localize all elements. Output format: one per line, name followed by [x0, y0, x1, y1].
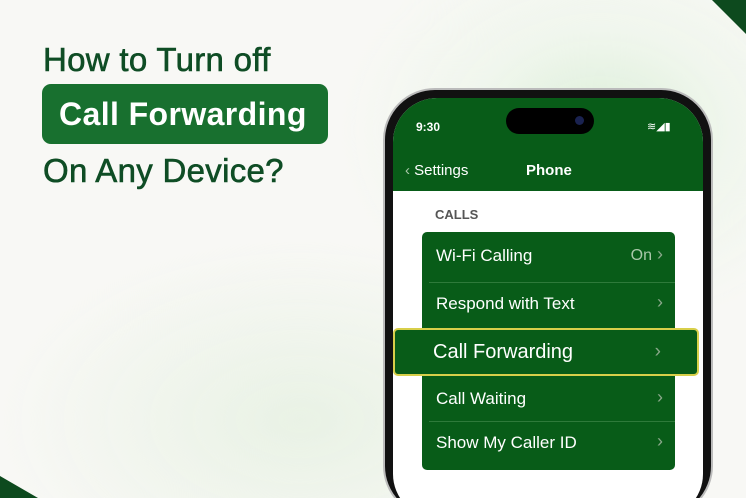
- phone: [383, 88, 713, 498]
- title pill: Call Forwarding: [59, 96, 307, 132]
- list: Wi-Fi Calling: [436, 246, 532, 265]
- dynamic island: [506, 108, 594, 134]
- header: [393, 98, 703, 191]
- list: Show My Caller ID: [436, 433, 577, 452]
- highlighted row: call forwarding: ›: [655, 341, 661, 362]
- corner: top right: [712, 0, 746, 34]
- list: ›: [657, 292, 663, 312]
- status time: 9:30: [416, 120, 440, 134]
- title line 3: On Any Device?: [43, 152, 284, 189]
- list: ›: [657, 431, 663, 451]
- section label: CALLS: [435, 207, 478, 222]
- list: ›: [657, 387, 663, 407]
- header: Phone: [526, 162, 572, 179]
- highlighted row: call forwarding: Call Forwarding: [433, 341, 573, 363]
- status icons: ≋◢▮: [647, 121, 671, 133]
- nav: ‹ Settings: [405, 162, 468, 179]
- list: On ›: [631, 244, 663, 264]
- title pill: [42, 84, 328, 144]
- highlighted row: call forwarding: [393, 328, 699, 376]
- list: [422, 232, 675, 470]
- list: Call Waiting: [436, 389, 526, 408]
- corner: bottom left: [0, 476, 38, 498]
- list: Respond with Text: [436, 294, 575, 313]
- screen: [393, 98, 703, 498]
- title line 1: How to Turn off: [43, 41, 271, 78]
